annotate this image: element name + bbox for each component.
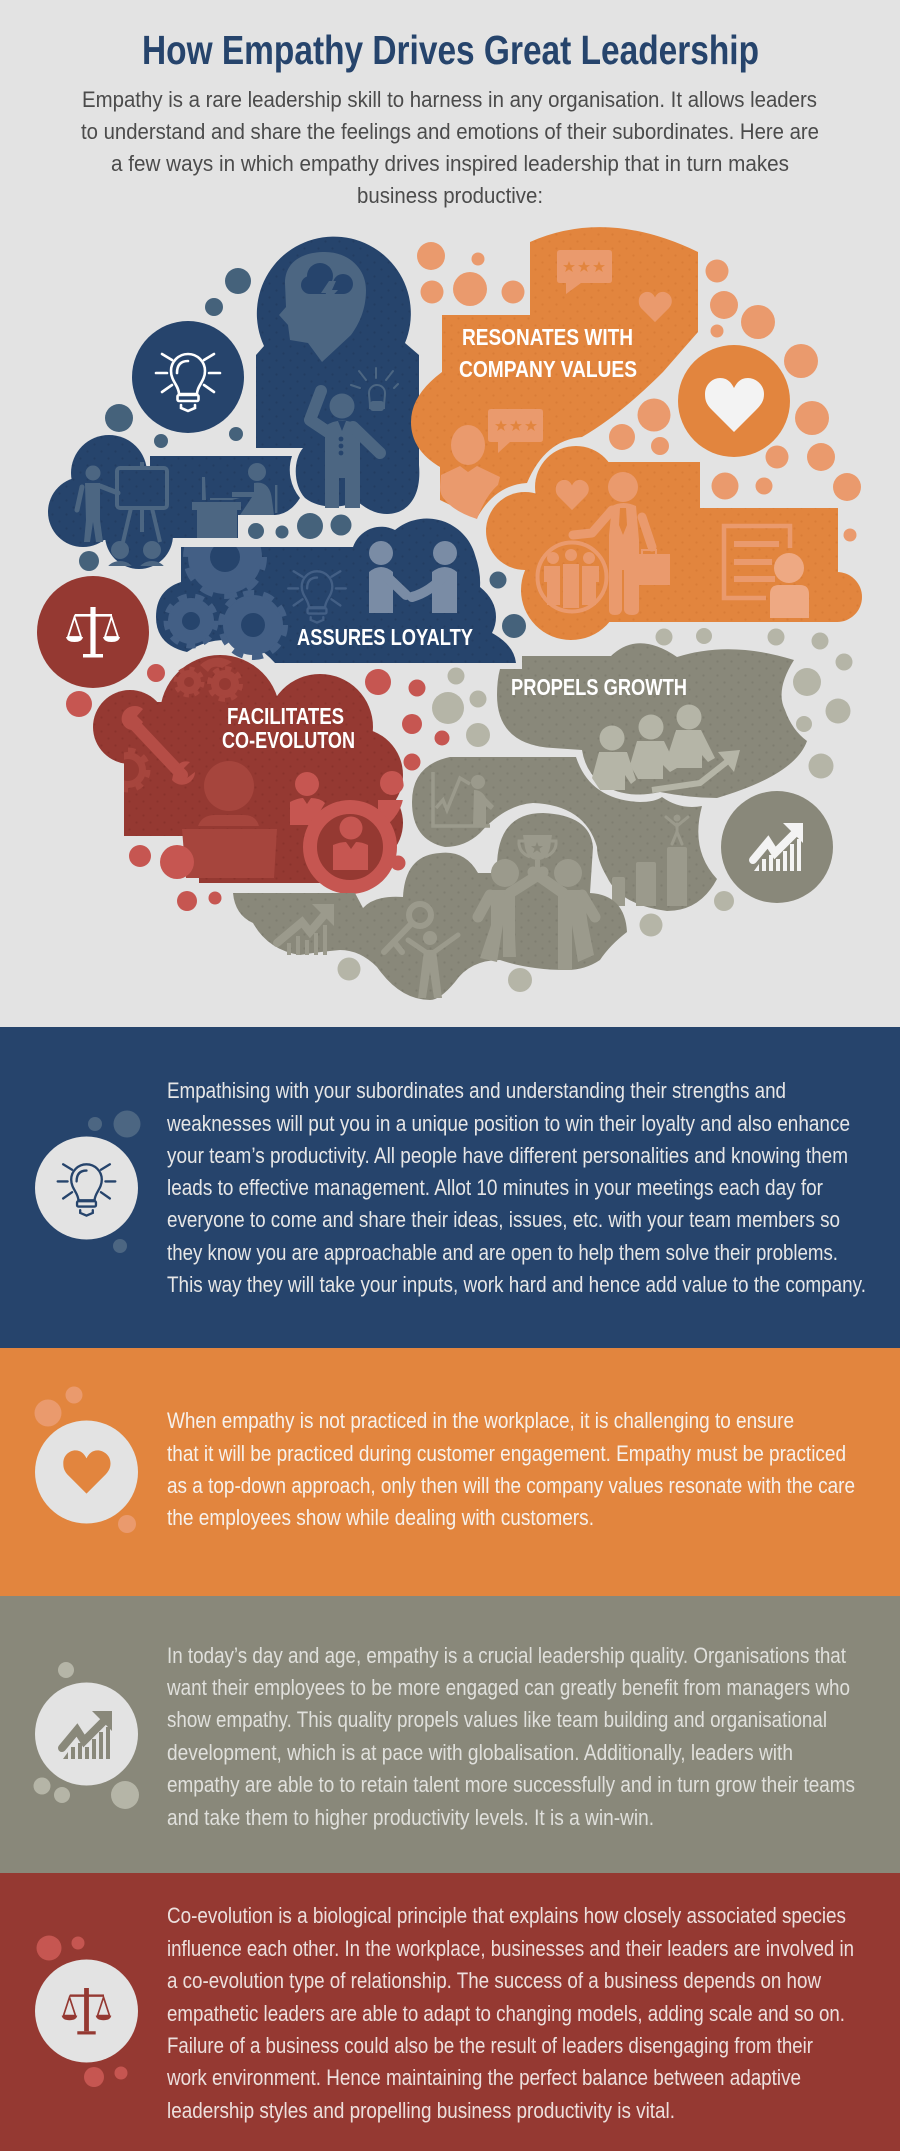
icon: gears xyxy=(164,547,288,660)
orange band bubbles xyxy=(34,1386,136,1533)
band: grey growth xyxy=(0,1596,900,1873)
icon: handshake xyxy=(369,541,457,613)
icon: document with person xyxy=(724,526,809,618)
intro text block xyxy=(81,87,819,208)
panel: navy presentation cloud xyxy=(48,435,300,583)
label: facilitates co-evolution xyxy=(222,703,355,753)
panel: orange resonates cloud xyxy=(411,227,698,519)
band: orange values xyxy=(0,1348,900,1596)
text block: co-evolution: work environment. Hence maintaining the perfect balance between adaptive xyxy=(166,2065,801,2090)
panel: red co-evolution cloud xyxy=(93,655,405,887)
icon: top gears xyxy=(176,658,240,699)
panel: navy head tower xyxy=(256,237,419,514)
icon: trophy and high five xyxy=(478,835,595,970)
red bubbles xyxy=(66,664,450,911)
icon: analyst with line chart xyxy=(433,772,494,826)
icon: outline bulb xyxy=(288,571,346,623)
icon: small idea bulb xyxy=(351,368,398,410)
label: propels growth: PROPELS GROWTH xyxy=(511,674,687,700)
label: resonates with company values: COMPANY VALUES xyxy=(459,356,637,382)
label: assures loyalty: ASSURES LOYALTY xyxy=(297,624,473,650)
text block: values xyxy=(167,1408,855,1530)
icon: presenter with board xyxy=(77,462,167,542)
icon: wrench and gear xyxy=(122,706,195,792)
icon: bulb badge xyxy=(35,1136,138,1240)
icon: head with storm cloud xyxy=(279,252,366,362)
red band bubbles xyxy=(36,1936,128,2087)
panel: grey chart cloud xyxy=(412,757,717,917)
text block: growth: development, which is at pace with globalisation. Additionally, leaders with xyxy=(167,1740,793,1765)
intro text block: business productive: xyxy=(357,183,543,208)
icon: ring with person xyxy=(310,807,390,887)
panel: grey teamwork cloud xyxy=(233,813,627,1000)
icon badge: orange heart xyxy=(678,345,790,457)
icon badge: navy bulb xyxy=(132,321,244,433)
grey bubbles xyxy=(338,628,852,992)
icon: small heart xyxy=(639,292,672,322)
icon: team with rising arrow xyxy=(592,704,740,790)
icon: bars with person on top xyxy=(612,847,687,906)
text block: values: the employees show while dealing with customers. xyxy=(167,1505,594,1530)
icon: rating speech bubble top xyxy=(557,250,612,294)
icon: customer with rating bubble xyxy=(440,409,543,519)
icon: audience heads xyxy=(108,541,164,566)
text block: loyalty xyxy=(166,1078,866,1297)
band: navy loyalty xyxy=(0,1027,900,1348)
icon: man with idea xyxy=(310,391,380,508)
icon: team members xyxy=(290,771,405,825)
grey band bubbles xyxy=(34,1662,139,1809)
icon: trend badge xyxy=(35,1682,138,1786)
intro text block: to understand and share the feelings and emotions of their subordinates. Here are xyxy=(81,119,819,144)
panel: grey propels growth cloud xyxy=(497,643,807,798)
icon: person at podium xyxy=(192,463,277,538)
text block: co-evolution: leadership styles and propelling business productivity is vital. xyxy=(167,2098,675,2123)
text block: growth xyxy=(166,1643,855,1830)
icon: key and person xyxy=(384,904,458,998)
icon: small heart xyxy=(556,480,589,510)
band: red co-evolution xyxy=(0,1873,900,2151)
icon: scales badge xyxy=(35,1960,138,2062)
label: facilitates co-evolution: CO-EVOLUTON xyxy=(222,727,355,753)
icon: person at laptop xyxy=(182,761,277,878)
orange bubbles xyxy=(417,242,861,542)
label: resonates with company values xyxy=(459,324,637,382)
intro text block: Empathy is a rare leadership skill to harness in any organisation. It allows leaders xyxy=(82,87,817,112)
icon: heart badge xyxy=(35,1420,138,1524)
label: facilitates co-evolution: FACILITATES xyxy=(227,703,344,729)
icon: manager with briefcase and team xyxy=(538,472,670,615)
panel: navy assures loyalty cloud xyxy=(156,518,516,663)
icon badge: grey trend chart xyxy=(721,791,833,903)
navy bubbles xyxy=(79,268,526,638)
icon: growth arrow with bars xyxy=(277,904,334,955)
navy band bubbles xyxy=(88,1110,140,1253)
intro text block: a few ways in which empathy drives inspired leadership that in turn makes xyxy=(111,151,789,176)
label: resonates with company values: RESONATES WITH xyxy=(462,324,633,350)
text block: co-evolution xyxy=(166,1903,854,2123)
text block: loyalty: Empathising with your subordinates and understanding their strengths and xyxy=(167,1078,786,1103)
text block: values: When empathy is not practiced in the workplace, it is challenging to ensure xyxy=(167,1408,794,1433)
panel: orange team cloud xyxy=(486,446,862,640)
icon: celebrating person xyxy=(666,814,688,844)
text block: growth: and take them to higher productivity levels. It is a win-win. xyxy=(167,1805,654,1830)
icon badge: red scales xyxy=(37,576,149,688)
title: How Empathy Drives Great Leadership xyxy=(142,27,759,73)
